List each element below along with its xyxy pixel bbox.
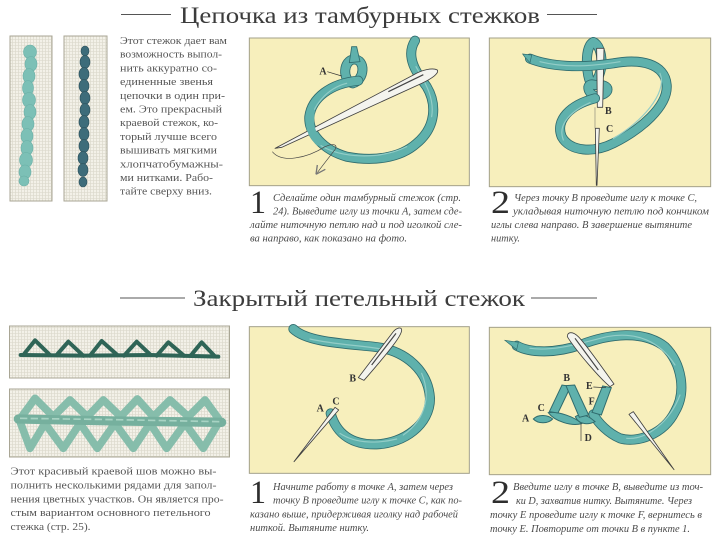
label: point A: A: [319, 67, 327, 78]
label: point D: D: [585, 433, 592, 444]
text block: closed buttonhole intro: стым вариантом основного петельного: [10, 508, 210, 519]
icon: lower needle: [629, 412, 674, 470]
text block: closed buttonhole intro: нения цветных участков. Он является про-: [10, 494, 224, 506]
panel: buttonhole step 1 illustration: [249, 327, 469, 473]
text block: chain stitch intro: возможность выпол-: [120, 50, 223, 61]
text block: buttonhole step 2: Введите иглу в точке В, выведите из точ-: [513, 482, 703, 493]
text block: buttonhole step 1: Начните работу в точке А, затем через: [272, 482, 453, 493]
text block: closed buttonhole intro: [10, 466, 224, 533]
text block: buttonhole step 1: [250, 475, 462, 534]
text block: closed buttonhole intro: полнить несколькими рядами для запол-: [10, 480, 217, 492]
label: point C: C: [538, 403, 545, 414]
label: point A: [319, 67, 342, 78]
title: closed buttonhole stitch: Закрытый петельный стежок: [193, 286, 526, 312]
text block: chain step 1: 1: [250, 185, 266, 221]
panel: buttonhole step 2 illustration: [489, 327, 711, 475]
label: point C: C: [606, 124, 613, 135]
swatch: dark green closed buttonhole sample: [10, 326, 230, 378]
text block: buttonhole step 2: ки D, захватив нитку. Вытяните. Через: [516, 496, 692, 507]
text block: buttonhole step 2: точку Е проведите иглу к точке F, вернитесь в: [490, 510, 703, 521]
label: point B: B: [563, 373, 570, 384]
panel: chain step 2 illustration: [489, 38, 711, 187]
thread: front crossing over needle: [310, 112, 319, 142]
text block: chain step 1: [249, 185, 462, 244]
text block: buttonhole step 1: ниткой. Вытяните нитку.: [250, 523, 369, 534]
text block: chain step 2: [491, 185, 710, 244]
label: point F: F: [589, 396, 595, 407]
text block: chain stitch intro: единенные звенья: [120, 77, 213, 88]
text block: buttonhole step 1: точку В проведите иглу к точке С, как по-: [273, 496, 462, 506]
text block: chain step 2: укладывая ниточную петлю под кончиком: [512, 206, 710, 218]
text block: chain step 2: нитку.: [491, 234, 520, 244]
title: chain stitch: Цепочка из тамбурных стежков: [180, 3, 540, 29]
icon: needle eye end: [597, 48, 604, 107]
thread: working loop: [505, 335, 681, 440]
label: point A: A: [317, 404, 325, 415]
panel: chain step 1 illustration: [249, 38, 469, 186]
text block: buttonhole step 2: точку Е. Повторите от точки В в пункте 1.: [490, 524, 690, 535]
icon: needle: [275, 69, 438, 148]
swatch: light teal chain stitch sample: [10, 36, 52, 201]
text block: buttonhole step 2: [490, 475, 703, 535]
label: point B: B: [349, 373, 356, 384]
text block: chain step 1: 24). Выведите иглу из точки А, затем сде-: [273, 206, 462, 218]
icon: chain links: [587, 42, 607, 96]
swatch: dark blue chain stitch sample: [64, 36, 107, 201]
label: point E: E: [586, 381, 593, 392]
icon: upper needle: [358, 328, 402, 380]
icon: upper needle: [567, 333, 614, 387]
label: point A: A: [522, 414, 530, 425]
text block: closed buttonhole intro: Этот красивый краевой шов можно вы-: [10, 466, 217, 478]
label: point D: [581, 423, 592, 444]
icon: lower needle: [294, 407, 339, 462]
label: point C: C: [332, 396, 340, 407]
thread: working loop: [293, 329, 430, 444]
label: point E: [586, 381, 606, 392]
icon: needle tip: [595, 128, 599, 185]
thread: working loop: [309, 41, 433, 159]
text block: chain stitch intro: краевой стежок, ко-: [120, 118, 219, 129]
text block: closed buttonhole intro: стежка (стр. 25).: [10, 522, 90, 533]
text block: chain stitch intro: цепочки в один при-: [120, 91, 226, 102]
icon: starting chain loop: [345, 47, 362, 83]
text block: chain step 1: лайте ниточную петлю над и под иголкой сле-: [249, 220, 462, 231]
text block: buttonhole step 1: 1: [250, 475, 266, 511]
text block: chain stitch intro: вышивать мягкими: [120, 146, 217, 157]
text block: chain stitch intro: нить аккуратно со-: [120, 63, 218, 74]
text block: chain step 1: Сделайте один тамбурный стежок (стр.: [273, 193, 461, 204]
text block: chain stitch intro: ем. Это прекрасный: [120, 104, 222, 116]
text block: chain stitch intro: [120, 36, 227, 198]
text block: chain stitch intro: ми нитками. Рабо-: [120, 173, 214, 184]
text block: chain stitch intro: тайте сверху вниз.: [120, 187, 212, 198]
icon: stitches: [533, 385, 611, 424]
text block: chain stitch intro: торый лучше всего: [120, 132, 217, 143]
text block: chain stitch intro: Этот стежок дает вам: [120, 36, 227, 47]
arrow: pull direction: [272, 145, 336, 174]
text block: chain step 2: 2: [491, 185, 510, 221]
swatch: light green filled buttonhole sample: [10, 389, 230, 457]
text block: buttonhole step 1: казано выше, придерживая иголку над рабочей: [250, 510, 458, 520]
text block: chain step 2: иглы слева направо. В завершение вытяните: [491, 220, 693, 231]
label: point B: B: [605, 106, 612, 117]
thread: working loop: [523, 54, 667, 150]
text block: chain stitch intro: хлопчатобумажны-: [120, 159, 224, 170]
text block: buttonhole step 2: 2: [491, 475, 510, 511]
text block: chain step 1: ва направо, как показано на фото.: [250, 234, 407, 244]
text block: chain step 2: Через точку В проведите иглу к точке С,: [514, 193, 697, 204]
